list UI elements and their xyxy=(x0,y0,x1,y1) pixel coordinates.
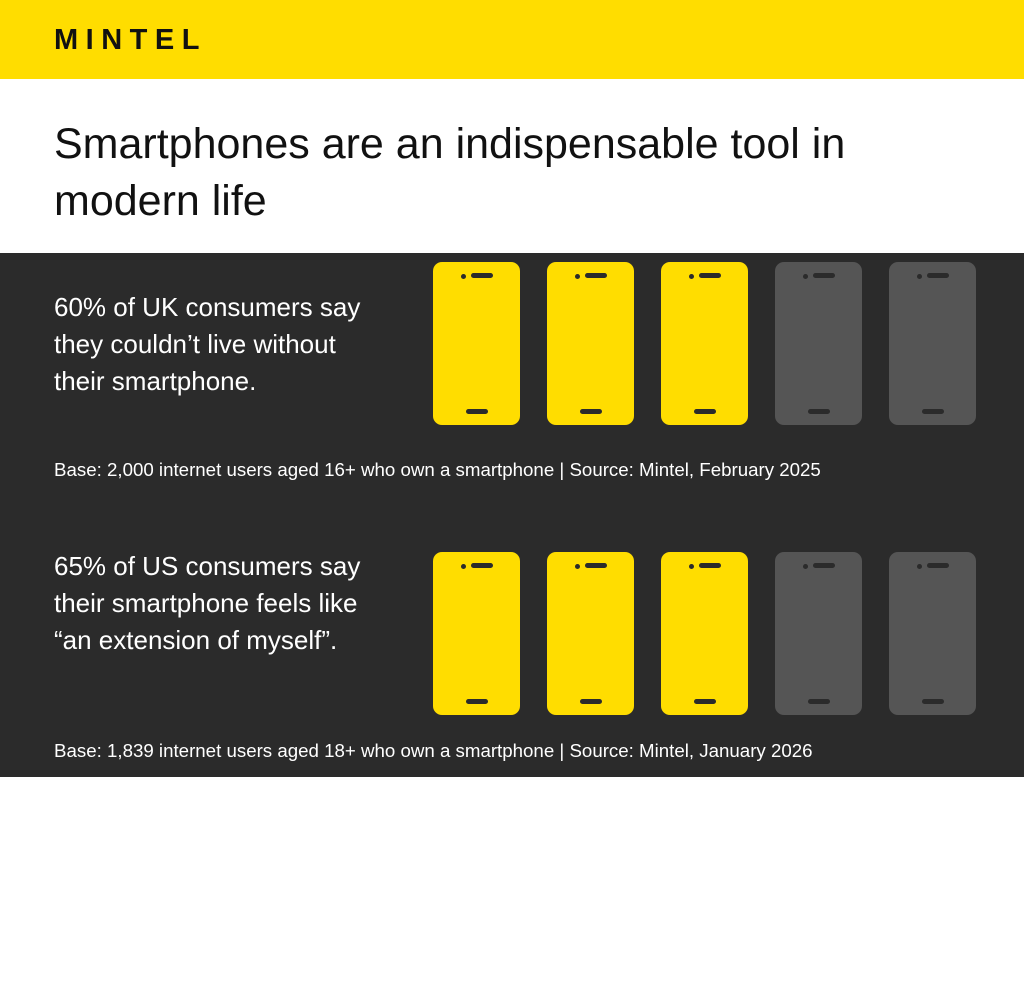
header bar xyxy=(0,0,1024,79)
base note 1: Base: 2,000 internet users aged 16+ who own a smartphone | Source: Mintel, February 2025 xyxy=(54,459,821,480)
stat text: US: 65% of US consumers say their smartphone feels like “an extension of myself”. xyxy=(54,551,360,655)
phones row 1 xyxy=(433,262,976,425)
logo: MINTEL xyxy=(54,24,207,56)
panel: stats xyxy=(0,253,1024,777)
stat text: UK: 60% of UK consumers say they couldn’t live without their smartphone. xyxy=(54,292,360,396)
title: Smartphones are an indispensable tool in modern life xyxy=(54,120,845,225)
base note 2: Base: 1,839 internet users aged 18+ who own a smartphone | Source: Mintel, January 2026 xyxy=(54,740,813,761)
phones row 2 xyxy=(433,552,976,715)
